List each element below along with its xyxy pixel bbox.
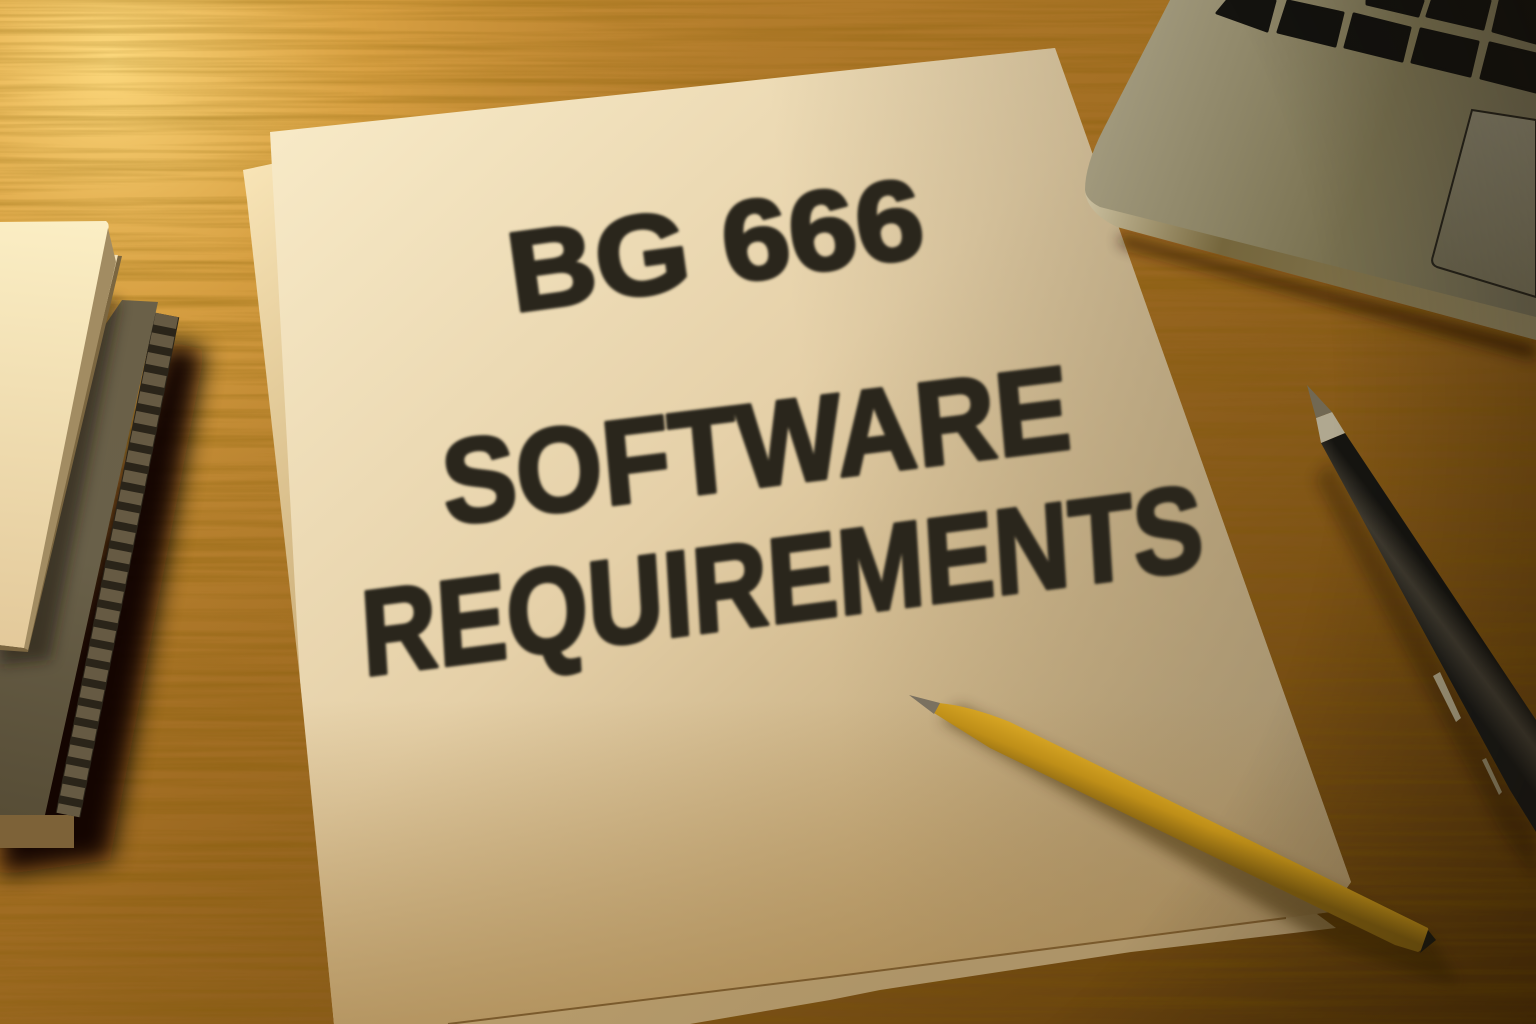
notebook spiral binding [68, 315, 167, 815]
heading: REQUIREMENTS: REQUIREMENTS [357, 458, 1207, 702]
notebook paper layers [0, 250, 122, 652]
notebook stack [0, 221, 205, 875]
notebook bottom pages [0, 815, 74, 848]
laptop trackpad [1432, 110, 1536, 297]
pencil end cap [1420, 930, 1436, 953]
pen tip [1307, 385, 1332, 418]
paper under sheet [243, 160, 1336, 1024]
laptop rim [1085, 190, 1536, 340]
pen [1307, 385, 1536, 880]
notebook top sheet [0, 221, 109, 648]
laptop keyboard keys [1217, 1, 1536, 92]
heading: SOFTWARE: SOFTWARE [436, 341, 1075, 551]
pen metal collar [1316, 412, 1345, 443]
pencil body [934, 703, 1429, 952]
pencil [909, 695, 1460, 985]
notebook grey cover [0, 300, 158, 815]
pen shadow [1315, 460, 1536, 880]
laptop deck [1085, 0, 1536, 317]
shadow under notebook papers [0, 300, 120, 665]
document title text [357, 154, 1207, 702]
notebook shadow [0, 340, 205, 875]
course code: BG 666: BG 666 [500, 154, 931, 336]
pen label marks [1433, 672, 1461, 722]
laptop [1085, 0, 1536, 360]
pencil shadow [940, 705, 1460, 985]
main paper sheet [250, 40, 1370, 1024]
pencil graphite tip [909, 695, 940, 714]
pen black body [1321, 433, 1536, 832]
laptop shadow [1120, 235, 1536, 360]
